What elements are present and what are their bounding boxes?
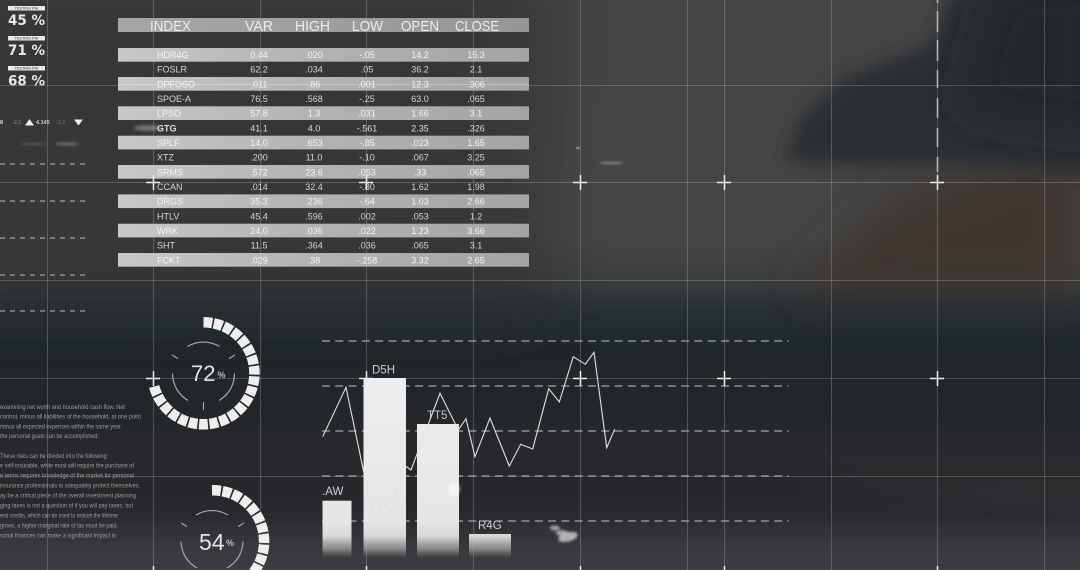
table row values: GTG — [157, 123, 176, 133]
table row values: 1.3 — [308, 109, 320, 119]
table row values: .306 — [467, 79, 485, 89]
table row values: 4.0 — [308, 123, 320, 133]
table row values: 3.32 — [411, 255, 429, 265]
table row values: 1.98 — [467, 182, 485, 192]
table header: VAR — [245, 18, 273, 35]
table row values: 0.44 — [250, 50, 268, 60]
table row values: 76.5 — [250, 94, 268, 104]
table row values: .065 — [467, 167, 485, 177]
table row values: 15.3 — [467, 50, 485, 60]
table row values: 1.62 — [411, 182, 429, 192]
table header: INDEX — [150, 18, 191, 35]
paragraph text block: These risks can be divided into the following: — [0, 453, 108, 460]
top-left test readouts — [8, 6, 45, 90]
table row values: CCAN — [157, 182, 183, 192]
table row values: 57.8 — [250, 109, 268, 119]
bar: R4G — [469, 520, 511, 558]
gauge: 54 percent: 54 — [199, 529, 225, 555]
table row values: HTLV — [157, 211, 179, 221]
table row values: .023 — [411, 138, 429, 148]
table row values: .067 — [411, 153, 429, 163]
paragraph text block: e terms requires knowledge of the market for personal — [0, 472, 134, 480]
ticker strip: -2.1 — [12, 120, 21, 126]
readout: 45 percent: TESTING PHI — [15, 7, 38, 11]
table row values — [157, 50, 485, 265]
bar chart — [322, 364, 511, 559]
table row values: -.258 — [357, 255, 377, 265]
table row values: .020 — [305, 50, 323, 60]
table row values: 1.2 — [470, 211, 482, 221]
table header: CLOSE — [455, 18, 499, 35]
table row values: 3.66 — [467, 226, 485, 236]
table row values: SPLF — [157, 138, 180, 148]
data table — [118, 18, 529, 267]
paragraph text block: ging taxes is not a question of if you will pay taxes, but — [0, 502, 133, 510]
readout: 68 percent: TESTING PHI — [15, 67, 38, 71]
table row values: -.80 — [359, 182, 375, 192]
table row values: -.10 — [359, 153, 375, 163]
table row values: 23.6 — [305, 167, 323, 177]
table row values: HDR4G — [157, 50, 189, 60]
gauge: 72 percent: 72 — [191, 361, 215, 386]
table row values: SPOE-A — [157, 94, 191, 104]
crosshair markers — [146, 175, 944, 570]
bar: D5H — [364, 364, 406, 558]
table row values: .236 — [305, 197, 323, 207]
readout: 68 percent: 68 % — [8, 74, 45, 90]
bar: TT5: TT5 — [427, 410, 447, 422]
readout: 68 percent — [8, 66, 45, 90]
smudges — [20, 125, 623, 164]
table row values: 2.66 — [467, 197, 485, 207]
paragraph text block: grows, a higher marginal rate of tax must be paid. — [0, 522, 118, 530]
table row values: 11.5 — [251, 241, 267, 251]
table row values: 62.2 — [250, 65, 268, 75]
readout: 45 percent — [8, 6, 45, 29]
table row values: -.05 — [359, 50, 375, 60]
table row values: 1.66 — [411, 109, 429, 119]
table row values: 1.65 — [467, 138, 485, 148]
table row values: FOSLR — [157, 65, 188, 75]
line chart — [323, 352, 615, 519]
readout: 71 percent: TESTING PHI — [15, 37, 38, 41]
table row values: DRGS — [157, 197, 183, 207]
table header: OPEN — [401, 18, 439, 35]
table row values: .036 — [358, 241, 376, 251]
left dashed guide lines — [0, 164, 85, 311]
table row values: 1.23 — [411, 226, 429, 236]
bar: D5H: D5H — [372, 364, 395, 376]
table row values: LPSO — [157, 109, 181, 119]
table row values: -.64 — [359, 197, 375, 207]
table row values: WRK — [157, 226, 178, 236]
table row values: .022 — [358, 226, 376, 236]
paragraph text block — [0, 404, 141, 540]
table row values: .33 — [414, 167, 426, 177]
bar: .AW: .AW — [322, 486, 343, 498]
gauge ring segments — [154, 322, 254, 424]
table row values: 3.25 — [467, 153, 485, 163]
readout: 71 percent: 71 % — [8, 43, 45, 59]
readout: 45 percent: 45 % — [8, 13, 45, 29]
paragraph text block: e self-insurable, while most will require the purchase of — [0, 462, 134, 470]
paragraph text block: insurance professionals to adequately protect themselves. — [0, 482, 140, 490]
table row values: 32.4 — [305, 182, 323, 192]
ticker strip: -1.1 — [56, 120, 65, 126]
table row values: -.85 — [359, 138, 375, 148]
table row values: .596 — [305, 211, 323, 221]
gauge ring segments — [199, 490, 264, 570]
ticker strip: 8 — [0, 120, 3, 126]
paragraph text block: sonal finances can make a significant impact in — [0, 532, 116, 540]
table row values: .031 — [358, 109, 376, 119]
gauge: 54 percent: % — [226, 538, 234, 548]
table row values: -.561 — [357, 123, 377, 133]
gauge: 54 percent — [181, 490, 264, 570]
table row values: 11.0 — [306, 153, 322, 163]
table row values: 63.0 — [411, 94, 429, 104]
table row values: 2.65 — [467, 255, 485, 265]
table row values: .364 — [305, 241, 323, 251]
table row values: 12.3 — [411, 79, 429, 89]
bar: .AW — [322, 486, 352, 559]
table row values: 2.1 — [470, 65, 482, 75]
table row values: SHT — [157, 241, 176, 251]
table row values: 36.2 — [411, 65, 429, 75]
table row values: .053 — [358, 167, 376, 177]
table header: LOW — [352, 18, 384, 35]
table row values: .653 — [305, 138, 323, 148]
table row values: 41.1 — [250, 123, 268, 133]
paragraph text block: examining net worth and household cash flow. Net — [0, 404, 125, 411]
table row values: .002 — [358, 211, 376, 221]
table row values: 14.2 — [411, 50, 429, 60]
table row values: .034 — [305, 65, 323, 75]
bar: R4G: R4G — [478, 520, 502, 532]
paragraph text block: end credits, which can be used to reduce the lifetime — [0, 512, 118, 520]
table row values: .029 — [250, 255, 268, 265]
table row values: 1.03 — [411, 197, 429, 207]
table row values: .053 — [411, 211, 429, 221]
table header — [118, 18, 529, 35]
bar: TT5 — [417, 410, 459, 558]
table row values: 45.4 — [250, 211, 268, 221]
chart dashed gridlines — [322, 341, 789, 521]
ticker strip: 4.145 — [36, 120, 50, 126]
readout: 71 percent — [8, 36, 45, 59]
table row values: XTZ — [157, 153, 175, 163]
table row values: .036 — [305, 226, 323, 236]
table row values: .326 — [467, 123, 485, 133]
table row values: 24.0 — [250, 226, 268, 236]
gauge: 72 percent: % — [217, 370, 226, 380]
paragraph text block: minus all expected expenses within the same year. — [0, 424, 122, 430]
gauge: 72 percent — [154, 322, 254, 424]
table row values: .065 — [411, 241, 429, 251]
table row values: DPFOSO — [157, 79, 195, 89]
table row values: FCKT — [157, 255, 181, 265]
table row values: .065 — [467, 94, 485, 104]
paragraph text block: control, minus all liabilities of the household, at one point — [0, 414, 141, 420]
table row values: SRMS — [157, 167, 183, 177]
table row values: 14.0 — [250, 138, 268, 148]
paragraph text block: the personal goals can be accomplished. — [0, 433, 99, 440]
blurred glints — [448, 482, 579, 544]
ticker strip — [0, 119, 83, 126]
table row values: .86 — [308, 79, 320, 89]
table row values: 35.3 — [250, 197, 268, 207]
gauge dial marks — [172, 342, 235, 410]
table row values: .200 — [250, 153, 268, 163]
table row values: .014 — [250, 182, 268, 192]
table row values: 2.35 — [411, 123, 429, 133]
table row values: .05 — [361, 65, 373, 75]
table row values: .38 — [308, 255, 320, 265]
table row values: .568 — [305, 94, 323, 104]
table row values: .572 — [250, 167, 268, 177]
table row values: 3.1 — [470, 241, 482, 251]
table row values: -.25 — [359, 94, 375, 104]
table row values: .001 — [358, 79, 376, 89]
table row values: 3.1 — [470, 109, 482, 119]
table header: HIGH — [295, 18, 330, 35]
table row values: .011 — [251, 79, 267, 89]
table highlight streak — [118, 84, 529, 86]
paragraph text block: ay be a critical piece of the overall investment planning — [0, 492, 136, 500]
vertical dashed marker — [936, 0, 938, 172]
gauge dial marks — [181, 511, 244, 568]
table row bars — [118, 48, 529, 267]
